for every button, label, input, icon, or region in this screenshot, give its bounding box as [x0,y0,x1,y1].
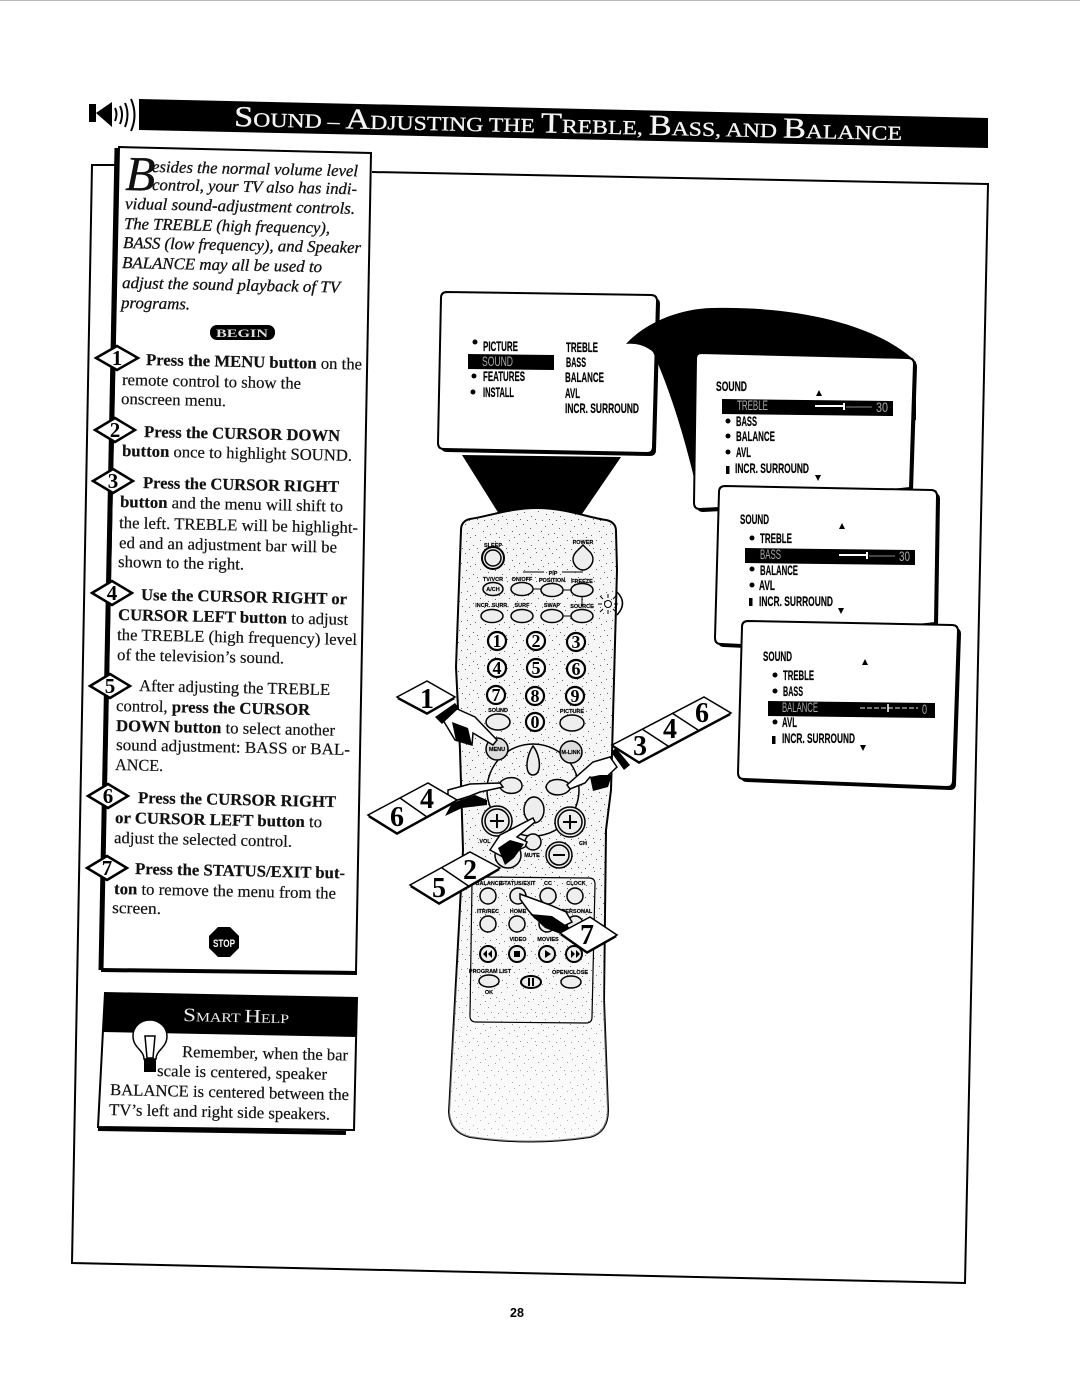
number keypad: 9 [570,686,580,706]
lower labels: STATUS/EXIT [501,881,536,887]
right menu items: AVL [565,385,580,401]
onscreen menu: bass [715,486,940,648]
cuff [435,703,459,724]
items: INCR. SURROUND [759,593,833,609]
remote lower fade [449,880,608,1142]
title banner [139,99,988,148]
smart help body [109,1042,349,1124]
highlighted bass row [745,548,915,565]
top labels: POWER [573,540,593,546]
step 2 [95,418,352,465]
icon: speaker [89,99,134,131]
lower labels: MOVIES [537,937,559,943]
intro text: esides the normal volume level [152,157,359,180]
intro text: B [125,146,156,202]
left menu items: FEATURES [483,368,525,384]
intro text: BALANCE may all be used to [122,253,322,276]
volume labels: VOL [479,839,491,845]
items: BALANCE [736,428,775,444]
swoosh between menus [626,308,916,482]
smart help header [103,993,357,1037]
lower labels: PERSONAL [562,909,593,915]
remote body [449,508,617,1142]
bullets [772,672,778,744]
step 2: 2 [110,418,120,442]
step 5 [90,674,350,775]
slider track [846,406,872,408]
icon: stop sign [209,927,239,957]
numeral 1: 1 [420,684,434,715]
treble slider [815,403,844,410]
menu and m-link labels: M-LINK [561,750,581,756]
intro text: control, your TV also has indi- [152,175,357,198]
icon: light bulb [133,1020,167,1072]
items: BASS [736,413,757,429]
step 3: button and the menu will shift to [120,492,343,516]
numerals [432,855,477,904]
cuff [611,748,630,770]
items [735,413,809,476]
top labels: FREEZE [571,579,593,585]
numeral 7: 7 [580,920,594,951]
selected row [468,354,554,370]
top buttons [481,545,593,622]
up arrow [816,390,822,396]
menu and m-link labels: MENU [489,747,505,753]
lower labels: HOME [510,909,527,915]
number keypad: 5 [532,658,540,678]
step 5: DOWN button to select another [116,716,336,740]
right menu items: TREBLE [566,339,598,355]
strip divider [400,798,427,817]
treble label: TREBLE [737,397,768,413]
step 3: ed and an adjustment bar will be [119,533,337,557]
hand [520,894,572,930]
step arrow strip [368,783,457,833]
smart help body: TV’s left and right side speakers. [109,1100,330,1124]
hand shading [530,914,570,936]
step 3: 3 [108,469,118,493]
items: INCR. SURROUND [782,730,855,746]
items [782,667,855,746]
number keypad: 1 [492,631,502,651]
hand shading [445,795,487,816]
step 7: 7 [102,856,112,880]
transport glyphs [483,950,580,986]
step arrow strip shadow [368,785,457,835]
items: AVL [759,577,775,593]
step 7: ton to remove the menu from the [114,879,336,903]
lower labels: ITR/REC [477,909,499,915]
remote control [449,508,622,1142]
treble value: 30 [876,399,888,415]
sound heading: SOUND [763,648,792,664]
step 5: control, press the CURSOR [116,696,311,719]
hand [448,783,503,803]
step arrow 7 shadow [560,919,617,954]
smart help body: scale is centered, speaker [157,1061,328,1084]
right menu items: BALANCE [565,369,604,385]
slider track [869,555,895,557]
step arrow 7 [560,917,617,952]
pointer: 1 [397,681,497,745]
intro text: adjust the sound playback of TV [122,273,342,297]
panel: smart help [98,993,357,1133]
hand [567,757,617,789]
icon: stop sign: STOP [213,938,235,950]
items: INCR. SURROUND [735,460,809,476]
lower key panel [470,877,595,1023]
items: TREBLE [783,667,814,683]
smart help body: BALANCE is centered between the [110,1080,349,1104]
hand shading [452,722,472,745]
volume labels [479,839,587,859]
step 4: of the television’s sound. [117,645,284,667]
scan edge line [0,0,1080,1]
step 6: 6 [103,784,113,808]
numerals: 6 [695,698,709,729]
numerals: 5 [432,873,446,904]
down arrow [815,475,821,481]
step 3 [93,469,358,574]
step 6 [88,784,336,851]
step 7: screen. [112,898,161,918]
panel: instructions [87,146,371,973]
lower labels: VIDEO [509,937,527,943]
left menu items: SOUND [482,353,513,369]
number keypad: 8 [530,686,540,706]
down arrow [838,608,844,614]
step 1 [96,346,362,410]
onscreen menu: treble [694,353,917,512]
items: BALANCE [760,562,798,578]
icon: sun [598,594,618,614]
strip dividers [642,713,698,746]
main content frame [72,165,988,1283]
number keypad: 7 [492,685,500,705]
number keypad [487,631,585,732]
bullets [726,418,730,474]
menu and m-link labels [489,747,581,756]
bass slider [839,552,867,559]
lower labels: CLOCK [566,881,586,887]
top labels: ON/OFF [512,577,533,583]
menu bullets [470,340,478,394]
step 4: CURSOR LEFT button to adjust [118,605,349,629]
sound and picture keys: SOUND [488,708,508,714]
step 6: or CURSOR LEFT button to [115,808,322,831]
numerals: 3 [633,731,647,762]
intro text [120,146,362,313]
items: AVL [736,444,751,460]
step 1: Press the MENU button on the [146,350,362,374]
number keypad: 2 [532,631,540,651]
lower labels: OPEN/CLOSE [552,970,588,976]
step 5: 5 [105,674,115,698]
plus and minus marks [490,814,577,855]
smart help body: Remember, when the bar [182,1042,349,1064]
cursor pad [486,738,582,836]
step 6: adjust the selected control. [114,828,292,851]
balance label: BALANCE [782,699,818,715]
number keypad: 3 [572,632,580,652]
lower labels: CC [544,881,552,887]
top labels [475,540,594,610]
step arrow strip [410,852,500,903]
sound heading: SOUND [740,511,769,527]
left menu items: PICTURE [483,338,518,354]
down arrow [860,745,866,751]
step arrow strip [612,697,731,762]
numerals: 6 [390,802,404,833]
sensor bump [617,592,622,615]
top labels: INCR. SURR. [475,603,509,609]
up arrow [839,523,845,529]
step 2: Press the CURSOR DOWN [144,422,340,445]
step 2: button once to highlight SOUND. [122,441,352,465]
number keypad: 4 [492,658,502,678]
bass label: BASS [760,546,781,562]
numerals [633,698,709,762]
top labels: A/CH [486,587,500,593]
top labels: TV/VCR [483,577,503,583]
numerals [390,784,434,833]
smart help heading: SMART HELP [183,1005,289,1028]
right menu items [565,339,639,416]
step 5: ANCE. [115,755,163,775]
step arrow strip shadow [612,699,731,764]
onscreen menu: balance [738,621,961,790]
top labels: POSITION [539,578,565,584]
intro text: programs. [120,293,190,313]
step 4 [92,581,358,667]
lower keys [479,888,583,988]
volume labels: CH [579,841,587,847]
volume and channel keys [482,806,585,868]
up arrow [862,659,868,665]
begin badge [210,325,275,340]
step 1: 1 [112,346,122,370]
intro text: vidual sound-adjustment controls. [125,194,355,218]
left menu items: INSTALL [483,384,514,400]
step 7: Press the STATUS/EXIT but- [135,859,345,882]
pointer: 5 2 [410,818,535,905]
pointer: 3 4 6 [567,697,731,791]
items: AVL [782,714,797,730]
number keypad: 6 [572,659,580,679]
intro text: BASS (low frequency), and Speaker [123,233,362,257]
balance value: 0 [922,701,927,717]
bullets [749,536,754,606]
step 4: 4 [107,581,118,605]
onscreen menu: main [438,292,660,456]
step 3: Press the CURSOR RIGHT [143,473,339,496]
items [759,530,833,609]
intro text: The TREBLE (high frequency), [124,214,330,237]
step arrow strip shadow [410,854,500,905]
step 4: the TREBLE (high frequency) level [117,625,358,649]
lower labels: OK [485,990,493,996]
numerals: 2 [463,855,477,886]
sound and picture keys [486,708,584,731]
numerals: 4 [663,714,677,745]
top labels: PIP [549,571,558,577]
sound heading: SOUND [716,378,747,394]
smart help bottom edge [98,1129,346,1133]
pointer: 7 [520,894,617,954]
hand [490,818,535,857]
step 3: shown to the right. [118,552,244,574]
lower labels [469,881,593,996]
items: BASS [783,683,803,699]
hand shading [590,775,612,791]
number keypad: 0 [530,712,540,732]
items: TREBLE [760,530,792,546]
begin badge: BEGIN [216,326,268,340]
hand shading [498,840,524,865]
step 7 [87,856,345,918]
step arrow 1 shadow [397,683,455,715]
highlighted balance row [768,701,935,718]
pointer: 6 4 [368,783,503,835]
step arrow 1 [397,681,455,713]
right menu items: INCR. SURROUND [565,400,639,416]
page number: 28 [510,1306,524,1320]
top labels: SWAP [544,603,560,609]
sound and picture keys: PICTURE [560,709,584,715]
highlighted treble row [722,399,893,416]
bass value: 30 [899,548,910,564]
step 5: sound adjustment: BASS or BAL- [116,735,350,759]
panel thick bottom edge [101,970,357,973]
step 6: Press the CURSOR RIGHT [138,788,336,811]
slider center tick [887,704,889,712]
step 5: After adjusting the TREBLE [139,676,330,699]
strip divider [442,868,470,887]
step 1: remote control to show the [122,370,301,393]
panel thick left edge [101,148,117,970]
projection funnel [462,455,621,514]
top labels: SLEEP [484,543,502,549]
hand [443,708,497,745]
top labels: SURF [515,603,530,609]
title text: SOUND – ADJUSTING THE TREBLE, BASS, AND BALANCE [234,101,902,147]
step 4: Use the CURSOR RIGHT or [141,585,347,608]
volume labels: MUTE [524,853,540,859]
right menu items: BASS [566,354,586,370]
left menu items [482,338,525,400]
lower labels: BALANCE [476,881,503,887]
numerals: 4 [420,784,434,815]
top labels: SOURCE [570,604,594,610]
balance slider [860,707,918,709]
step 3: the left. TREBLE will be highlight- [119,513,358,537]
step 1: onscreen menu. [121,389,226,410]
lower labels: PROGRAM LIST [469,969,512,975]
